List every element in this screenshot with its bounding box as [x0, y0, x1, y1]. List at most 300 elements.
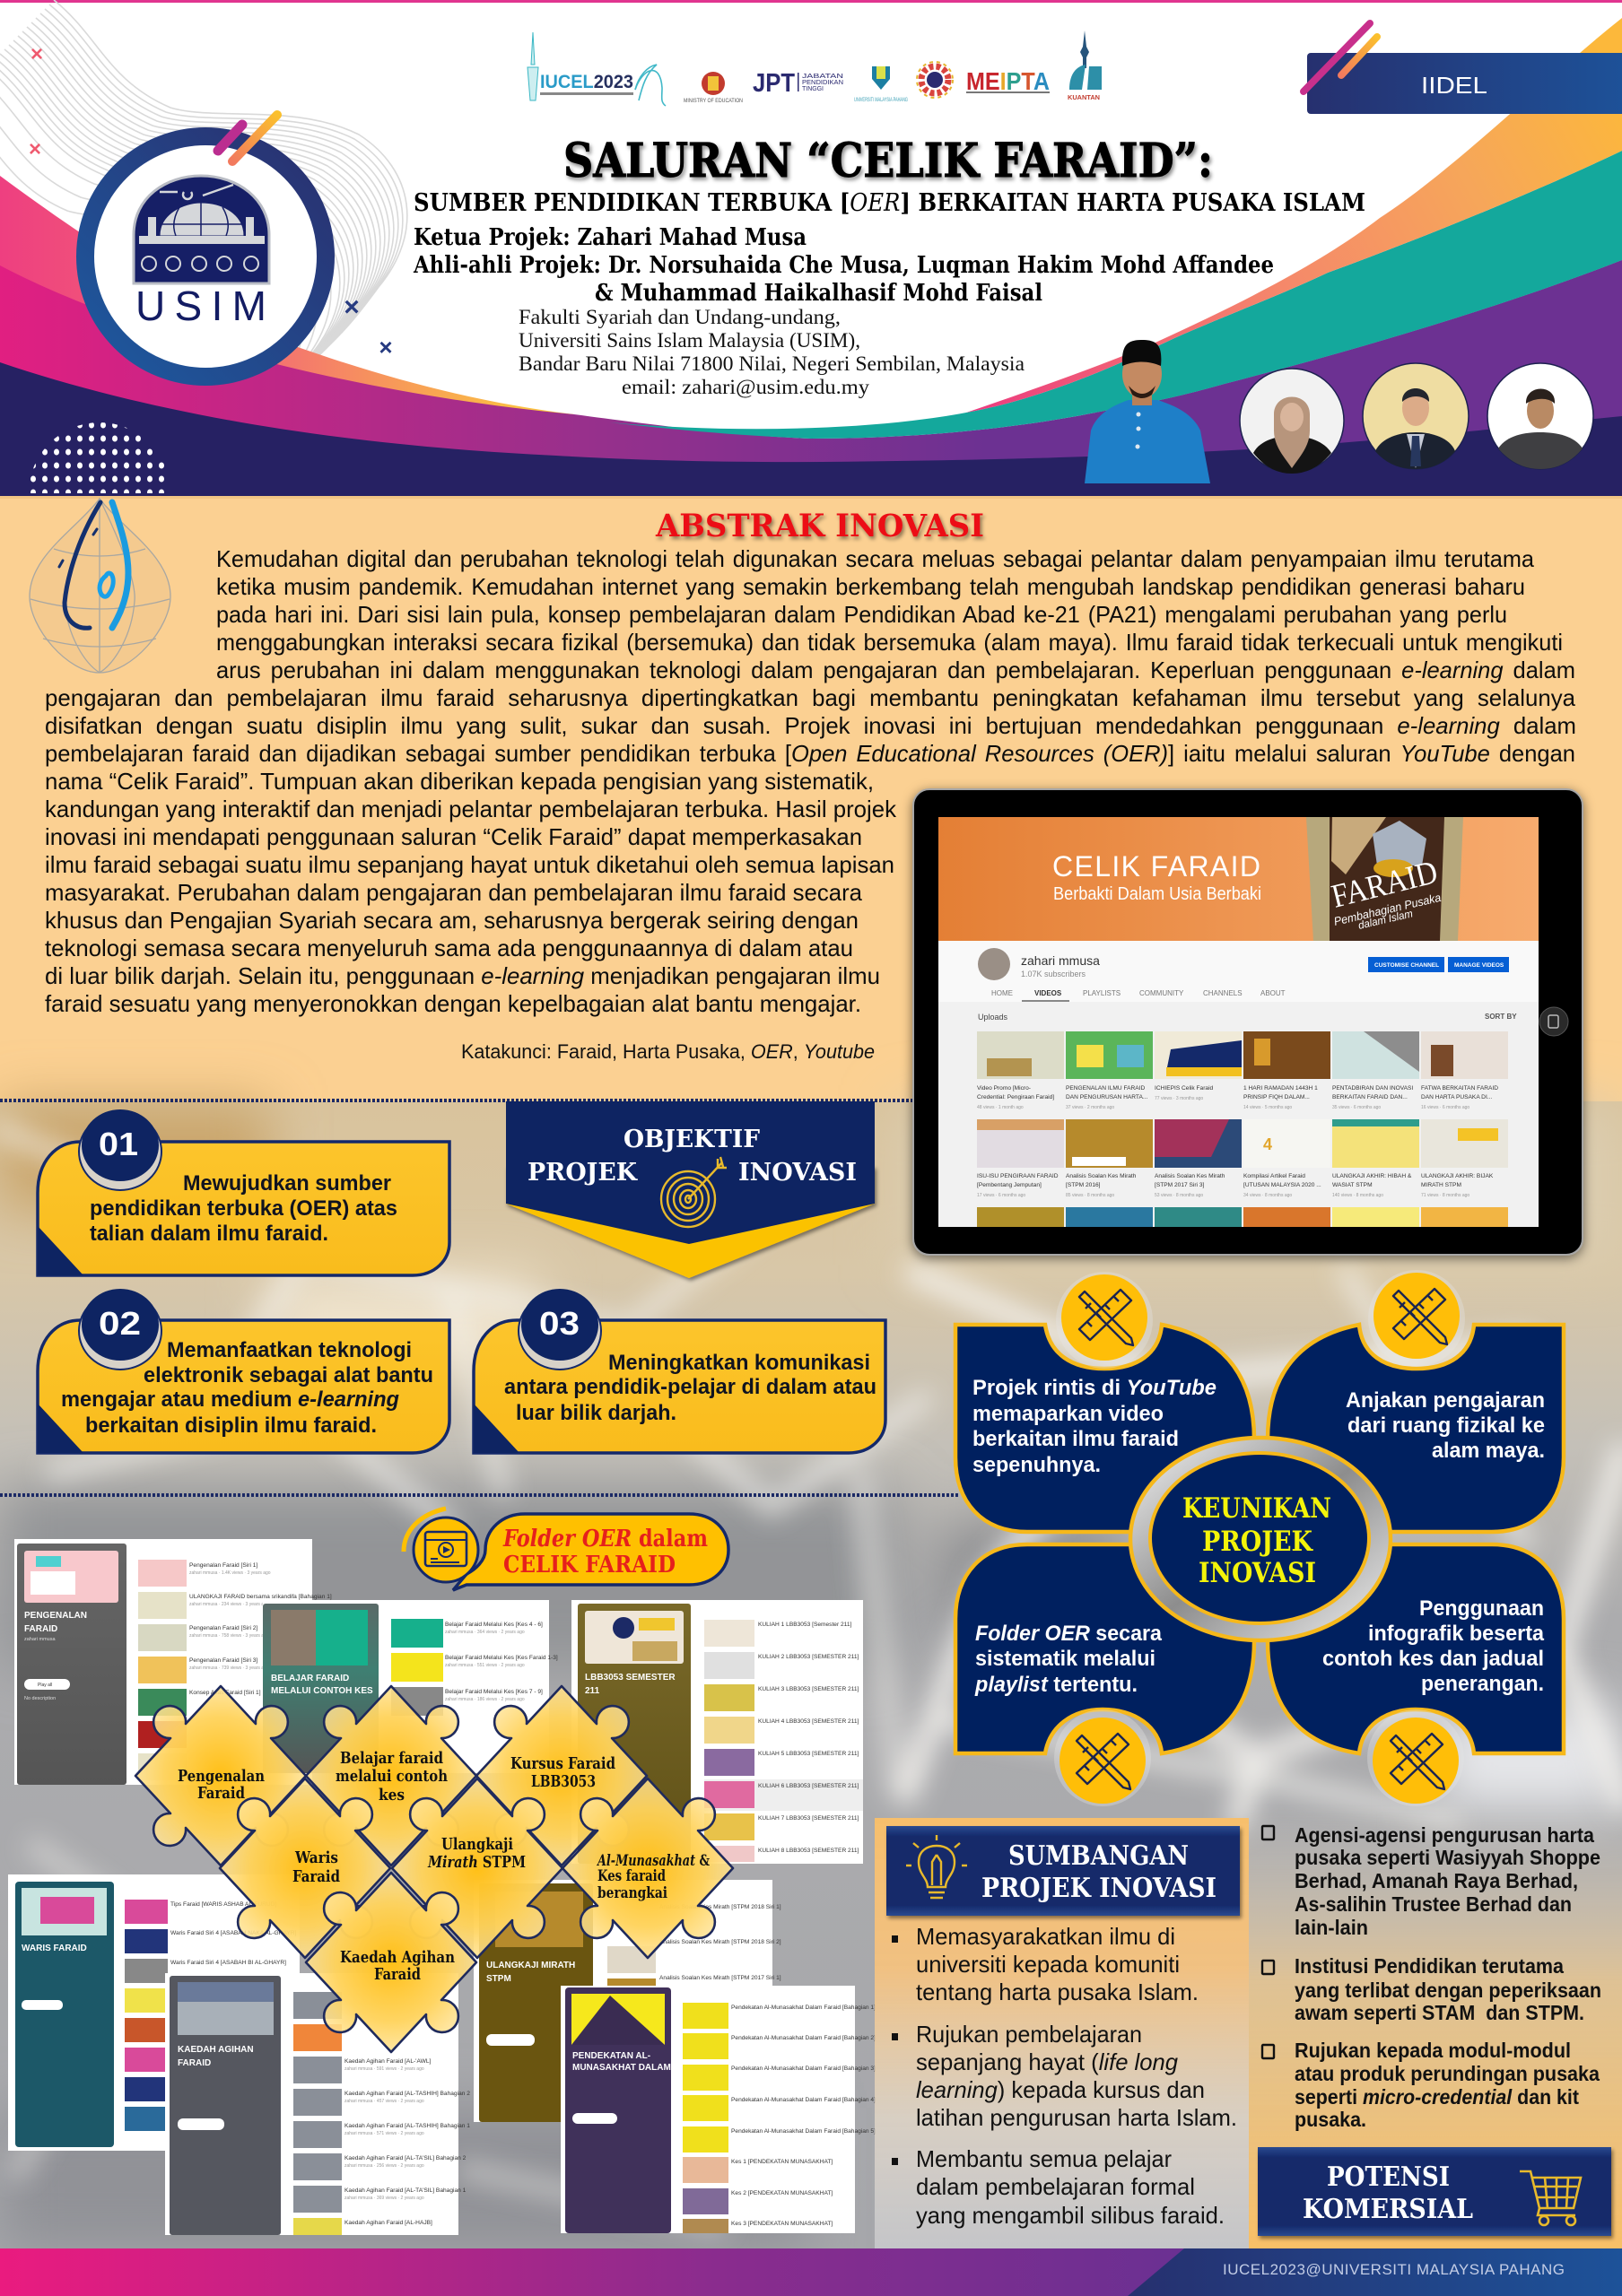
channel bar: zahari mmusa [1021, 953, 1100, 968]
logo: ring emblem [917, 62, 953, 98]
panel: playlist pendekatan al-munasakhat: Pendekatan Al-Munasakhat Dalam Faraid [Bahagian 5] [731, 2128, 876, 2135]
channel bar: HOME [991, 989, 1013, 997]
photo: project leader [1085, 340, 1210, 483]
badge: folder oer dalam celik faraid: Folder OER dalam [502, 1526, 708, 1552]
checklist: Agensi-agensi pengurusan harta [1295, 1823, 1594, 1847]
icon: shopping cart [1520, 2171, 1581, 2225]
logo: UMP: UNIVERSITI MALAYSIA PAHANG [854, 98, 908, 103]
panel: playlist kaedah agihan: Kaedah Agihan Faraid [AL-TASHIH] Bahagian 2 [344, 2091, 470, 2097]
channel banner: Berbakti Dalam Usia Berbaki [1053, 884, 1261, 904]
panel: playlist kaedah agihan [165, 1973, 470, 2235]
channel bar: PLAYLISTS [1083, 989, 1121, 997]
footer bar [0, 2248, 1622, 2296]
abstract text: faraid sesuatu yang menyeronokkan dengan kepelbagaian alat bantu mengajar. [45, 990, 861, 1017]
IIDEL banner [1304, 23, 1622, 114]
panel: playlist pendekatan al-munasakhat: Kes 3 [PENDEKATAN MUNASAKHAT] [731, 2221, 833, 2227]
quadrant: top left: berkaitan ilmu faraid [972, 1427, 1179, 1451]
logo: UMP [854, 66, 908, 103]
video grid: 77 views · 3 months ago [1155, 1096, 1203, 1101]
panel: playlist pendekatan al-munasakhat: Kes 2 [PENDEKATAN MUNASAKHAT] [731, 2190, 833, 2196]
panel: potensi komersial [1249, 1803, 1622, 2249]
bullet list: yang mengambil silibus faraid. [916, 2202, 1225, 2229]
project members: Ahli-ahli Projek: Dr. Norsuhaida Che Musa, Luqman Hakim Mohd Affandee [413, 252, 1274, 279]
panel: playlist pendekatan al-munasakhat: Pendekatan Al-Munasakhat Dalam Faraid [Bahagian 2] [731, 2035, 876, 2041]
panel: playlist pendekatan al-munasakhat: MUNASAKHAT DALAM... [572, 2063, 678, 2073]
channel bar: CUSTOMISE CHANNEL [1374, 962, 1439, 969]
panel: playlist pengenalan faraid: ULANGKAJI FARAID bersama srikandifa [Bahagian 1] [189, 1594, 332, 1600]
video grid: [Pembentang Jemputan] [977, 1182, 1042, 1188]
x marks: × [29, 137, 41, 161]
banner: objektif projek inovasi [506, 1101, 875, 1278]
video grid: 48 views · 1 month ago [977, 1105, 1024, 1110]
title [414, 134, 1365, 217]
panel: playlist pendekatan al-munasakhat: PENDEKATAN AL- [572, 2051, 650, 2061]
panel: playlist waris faraid: WARIS FARAID [22, 1944, 87, 1953]
checklist: As-salihin Trustee Berhad dan [1295, 1892, 1572, 1916]
card text: Mewujudkan sumber [183, 1171, 391, 1196]
abstract text [45, 545, 1576, 1017]
book cover [1306, 817, 1463, 941]
abstract text: pembelajaran faraid dan dijadikan sebagai sumber pendidikan terbuka [Open Educational Resources (OER)] iaitu melalui saluran YouTube dengan [45, 740, 1575, 767]
logo: MEIPTA: MEIPTA [966, 67, 1050, 95]
puzzle piece: pengenalan faraid: Pengenalan [178, 1767, 265, 1786]
panel: playlist pengenalan faraid: zahari mmusa · 234 views · 3 years ago [189, 1602, 269, 1607]
channel bar: SORT BY [1485, 1013, 1517, 1021]
video grid: DAN PENGURUSAN HARTA... [1066, 1094, 1148, 1100]
screen [938, 817, 1539, 1227]
panel: playlist kaedah agihan: Kaedah Agihan Faraid [AL-TASHIH] Bahagian 1 [344, 2123, 470, 2129]
partner logos strip [528, 30, 1102, 106]
video grid: Kompilasi Artikel Faraid [1243, 1173, 1305, 1179]
panel: playlist pengenalan faraid: FARAID [24, 1624, 57, 1634]
quadrant: bottom right: infografik beserta [1368, 1622, 1545, 1646]
video grid: ULANGKAJI AKHIR: BIJAK [1421, 1173, 1494, 1179]
logo: ministry crest [684, 72, 743, 104]
abstract text: teknologi semasa secara menyeluruh sama ada penggunaannya di dalam atau [45, 935, 853, 961]
banner: objektif projek inovasi: OBJEKTIF [624, 1126, 760, 1153]
abstract text: inovasi ini mendapati penggunaan saluran “Celik Faraid” dapat memperkasakan [45, 823, 862, 850]
video grid: 85 views · 8 months ago [1066, 1193, 1114, 1198]
checklist: awam seperti STAM dan STPM. [1295, 2001, 1584, 2024]
panel: playlist ulangkaji mirath: Analisis Soalan Kes Mirath [STPM 2018 Siri 1] [659, 1904, 781, 1910]
bullet list: Memasyarakatkan ilmu di [916, 1923, 1175, 1950]
panel: playlist lbb3053: KULIAH 3 LBB3053 [SEMESTER 211] [758, 1686, 859, 1692]
puzzle piece: ulangkaji mirath stpm: Ulangkaji [441, 1835, 513, 1854]
panel: playlist ulangkaji mirath: Analisis Soalan Kes Mirath [STPM 2018 Siri 2] [659, 1939, 781, 1945]
abstract text: menggabungkan interaksi secara fizikal (bersemuka) dan tidak bersemuka (alam maya). Ilmu faraid tidak terkecuali untuk mengikuti [216, 629, 1563, 656]
quadrant: bottom left [955, 1544, 1254, 1753]
card text: mengajar atau medium e-learning [61, 1387, 399, 1412]
icon: pencil and ruler top right [1368, 1270, 1465, 1367]
heading bar: PROJEK INOVASI [981, 1873, 1216, 1904]
panel: playlist pengenalan faraid: zahari mmusa · 1.4K views · 3 years ago [189, 1570, 271, 1576]
abstract text: pada hari ini. Dari sisi lain pula, konsep pembelajaran dalam Pendidikan Abad ke-21 (PA21) mengalami perubahan yang perlu [216, 601, 1507, 628]
video grid: ISU-ISU PENGIRAAN FARAID [977, 1173, 1059, 1179]
channel bar [938, 941, 1539, 1022]
project members: & Muhammad Haikalhasif Mohd Faisal [595, 280, 1042, 307]
panel: playlist lbb3053: LBB3053 SEMESTER [585, 1673, 676, 1683]
channel banner: CELIK FARAID [1052, 850, 1260, 883]
panel: playlist belajar faraid: zahari mmusa · 551 views · 2 years ago [445, 1663, 525, 1668]
objective card 03 [474, 1289, 885, 1453]
panel: playlist kaedah agihan: FARAID [178, 2058, 211, 2068]
abstract text: arus perubahan ini dalam menggunakan teknologi dalam pengajaran dan pembelajaran. Keperluan penggunaan e-learning dalam [216, 657, 1575, 683]
puzzle map of playlists [135, 1686, 733, 2052]
decorative stripes on logo [218, 115, 277, 161]
puzzle piece: belajar faraid [306, 1686, 476, 1866]
video grid: ICHIEPIS Celik Faraid [1155, 1085, 1214, 1091]
icon: video browser [414, 1518, 478, 1582]
video grid [977, 1031, 1508, 1227]
book cover: dalam Islam [1357, 907, 1414, 932]
card text: talian dalam ilmu faraid. [90, 1222, 328, 1246]
puzzle piece: kursus faraid: LBB3053 [531, 1772, 596, 1791]
puzzle piece: al-munasakhat: Al-Munasakhat & [596, 1852, 710, 1870]
panel: playlist belajar faraid: Belajar Faraid Melalui Kes [Kes Faraid 1-3] [445, 1655, 558, 1661]
panel: playlist belajar faraid: Belajar Faraid Melalui Kes [Kes 7 - 9] [445, 1689, 543, 1695]
panel: playlist pengenalan faraid: Konsep Asas Faraid [Siri 1] [189, 1690, 261, 1696]
puzzle piece: kaedah agihan faraid [306, 1873, 476, 2052]
puzzle piece: pengenalan faraid: Faraid [197, 1784, 245, 1803]
puzzle piece: al-munasakhat [562, 1779, 733, 1958]
quadrant: top right: dari ruang fizikal ke [1347, 1413, 1545, 1438]
affiliation [519, 306, 1025, 398]
puzzle piece: kursus faraid: Kursus Faraid [510, 1754, 615, 1773]
USIM logo: USIM [135, 283, 266, 329]
puzzle piece: kaedah agihan faraid: Kaedah Agihan [340, 1948, 455, 1967]
puzzle piece: ulangkaji mirath stpm: Mirath STPM [427, 1853, 526, 1872]
banner: objektif projek inovasi: INOVASI [738, 1159, 857, 1187]
video grid: BERKAITAN FARAID DAN... [1332, 1094, 1408, 1100]
panel: playlist kaedah agihan: Kaedah Agihan Faraid [AL-TA'SIL] Bahagian 1 [344, 2187, 467, 2194]
x marks: × [344, 292, 360, 322]
checklist: seperti micro-credential dan kit [1295, 2085, 1579, 2109]
card text: Memanfaatkan teknologi [167, 1338, 412, 1362]
logo: JPT: TINGGI [802, 84, 824, 92]
bullet list: tentang harta pusaka Islam. [916, 1979, 1199, 2005]
quadrant: bottom right: Penggunaan [1419, 1596, 1544, 1621]
bullet list: universiti kepada komuniti [916, 1951, 1180, 1978]
heading bar [886, 1826, 1240, 1916]
objective card 02 [38, 1289, 449, 1453]
puzzle piece: kaedah agihan faraid: Faraid [374, 1965, 421, 1984]
video grid: MIRATH STPM [1421, 1182, 1461, 1188]
panel: playlist kaedah agihan: zahari mmusa · 591 views · 2 years ago [344, 2066, 424, 2072]
logo: JPT: PENDIDIKAN [802, 78, 843, 86]
video grid: 4 [1263, 1135, 1272, 1153]
badge: folder oer dalam celik faraid [404, 1509, 728, 1590]
panel: playlist pendekatan al-munasakhat: Pendekatan Al-Munasakhat Dalam Faraid [Bahagian 4] [731, 2097, 876, 2103]
center hub: INOVASI [1199, 1557, 1316, 1589]
icon: Iqra drop logo [30, 499, 170, 673]
quadrant: bottom right [1268, 1544, 1564, 1753]
logo: IUCEL 2023 [528, 32, 666, 106]
quadrant: top right: alam maya. [1432, 1439, 1545, 1463]
panel: playlist pengenalan faraid: Pengenalan Faraid [Siri 2] [189, 1625, 257, 1631]
center hub: PROJEK [1202, 1526, 1313, 1558]
video grid: DAN HARTA PUSAKA DI... [1421, 1094, 1492, 1100]
video grid: [STPM 2016] [1066, 1182, 1101, 1188]
badge: folder oer dalam celik faraid: CELIK FARAID [503, 1552, 676, 1578]
footer bar: IUCEL2023@UNIVERSITI MALAYSIA PAHANG [1223, 2261, 1565, 2278]
abstract text: ilmu faraid sebagai suatu ilmu sepanjang hayat untuk diketahui oleh semua lapisan [45, 851, 894, 878]
abstract text: di luar bilik darjah. Selain itu, penggunaan e-learning menjadikan pengajaran ilmu [45, 962, 880, 989]
card text: antara pendidik-pelajar di dalam atau [504, 1375, 876, 1399]
title: SALURAN “CELIK FARAID”: [563, 134, 1213, 188]
panel: playlist lbb3053: KULIAH 6 LBB3053 [SEMESTER 211] [758, 1783, 859, 1789]
video grid: 1 HARI RAMADAN 1443H 1 [1243, 1085, 1318, 1091]
tablet: YouTube channel screenshot [913, 789, 1583, 1255]
center hub [1130, 1438, 1391, 1640]
channel banner [938, 817, 1539, 941]
puzzle piece: kursus faraid [476, 1686, 647, 1866]
panel: playlist belajar faraid: Belajar Faraid Melalui Kes [Kes 4 - 6] [445, 1622, 543, 1628]
blurred lattice background [0, 1101, 1622, 2251]
panel: playlist pendekatan al-munasakhat [561, 1986, 876, 2233]
affiliation: email: zahari@usim.edu.my [622, 376, 870, 398]
logo: JPT: JABATAN [802, 72, 843, 80]
video grid: WASIAT STPM [1332, 1182, 1373, 1188]
dotted dividers [0, 1100, 958, 1495]
checklist: Berhad, Amanah Raya Berhad, [1295, 1869, 1578, 1892]
heading bar: SUMBANGAN [1008, 1840, 1189, 1872]
video grid: PENGENALAN ILMU FARAID [1066, 1085, 1146, 1091]
panel: playlist pendekatan al-munasakhat: Pendekatan Al-Munasakhat Dalam Faraid [Bahagian 1] [731, 2005, 876, 2011]
puzzle piece: al-munasakhat: berangkai [597, 1884, 667, 1902]
panel: playlist ulangkaji mirath: Analisis Soalan Kes Mirath [STPM 2017 Siri 1] [659, 1975, 781, 1981]
panel: playlist kaedah agihan: zahari mmusa · 457 views · 2 years ago [344, 2099, 424, 2104]
video grid: ULANGKAJI AKHIR: HIBAH & [1332, 1173, 1412, 1179]
panel: playlist lbb3053 [571, 1600, 863, 1864]
panel: playlist ulangkaji mirath [474, 1880, 781, 2122]
panel: playlist lbb3053: KULIAH 5 LBB3053 [SEMESTER 211] [758, 1751, 859, 1757]
panel: playlist ulangkaji mirath: ULANGKAJI MIRATH [486, 1961, 575, 1970]
video grid: Credential: Pengiraan Faraid] [977, 1094, 1054, 1100]
panel: playlist pengenalan faraid: Pengenalan Faraid [Siri 3] [189, 1657, 257, 1664]
icon: home button [1539, 1007, 1568, 1036]
panel: playlist belajar faraid: BELAJAR FARAID [271, 1674, 349, 1683]
quadrant: top left: sepenuhnya. [972, 1453, 1101, 1477]
logo: Kuantan tower [1068, 30, 1102, 101]
checklist: pusaka seperti Wasiyyah Shoppe [1295, 1846, 1600, 1869]
panel: playlist lbb3053: KULIAH 1 LBB3053 [Semester 211] [758, 1622, 852, 1628]
panel: playlist pengenalan faraid: zahari mmusa · 739 views · 3 years ago [189, 1665, 269, 1671]
video grid: 34 views · 8 months ago [1243, 1193, 1292, 1198]
channel bar: 1.07K subscribers [1021, 970, 1086, 978]
puzzle piece: ulangkaji mirath stpm [392, 1779, 562, 1958]
quadrant: top right [1268, 1325, 1564, 1532]
abstract text: masyarakat. Perubahan dalam pengajaran dan pembelajaran ilmu faraid secara [45, 879, 863, 906]
card text: berkaitan disiplin ilmu faraid. [85, 1413, 377, 1438]
number badge 01: 01 [99, 1126, 138, 1162]
card text: Meningkatkan komunikasi [608, 1351, 870, 1375]
panel: playlist lbb3053: KULIAH 4 LBB3053 [SEMESTER 211] [758, 1718, 859, 1725]
quadrant: top left [955, 1325, 1254, 1532]
quadrant: bottom right: contoh kes dan jadual [1322, 1647, 1544, 1671]
panel: playlist kaedah agihan: Kaedah Agihan Faraid [AL-HAJB] [344, 2220, 432, 2226]
checklist [1262, 1823, 1601, 2131]
book cover: FARAID [1328, 854, 1442, 916]
icon: pencil and ruler bottom left [1054, 1709, 1151, 1806]
panel: playlist pengenalan faraid: zahari mmusa [24, 1637, 56, 1642]
USIM logo [85, 136, 326, 377]
heading bar [1258, 2147, 1611, 2236]
channel bar: COMMUNITY [1139, 989, 1184, 997]
panel: playlist belajar faraid [263, 1600, 558, 1773]
subtitle: SUMBER PENDIDIKAN TERBUKA [OER] BERKAITAN HARTA PUSAKA ISLAM [414, 189, 1365, 217]
affiliation: Universiti Sains Islam Malaysia (USIM), [519, 329, 860, 352]
video grid: 35 views · 6 months ago [1332, 1105, 1381, 1110]
card text: luar bilik darjah. [516, 1401, 676, 1425]
photo: member 2 [1363, 363, 1469, 469]
panel: playlist lbb3053: KULIAH 7 LBB3053 [SEMESTER 211] [758, 1815, 859, 1822]
panel: sumbangan projek inovasi [875, 1818, 1249, 2249]
panel: playlist pengenalan faraid: PENGENALAN [24, 1611, 87, 1621]
puzzle piece: waris faraid [220, 1779, 390, 1958]
heading bar: KOMERSIAL [1303, 2194, 1473, 2225]
abstract text: disifatkan dengan suatu disiplin ilmu yang sulit, sukar dan susah. Projek inovasi ini bertujuan mendedahkan penggunaan e-learning dalam [45, 712, 1576, 739]
number badge 01 [79, 1109, 161, 1190]
video grid: Video Promo [Micro- [977, 1085, 1031, 1091]
bullet list: Rujukan pembelajaran [916, 2021, 1142, 2048]
dotted semicircle decoration [31, 422, 164, 493]
puzzle piece: belajar faraid: Belajar faraid [340, 1749, 443, 1768]
objective card 01 [38, 1109, 449, 1275]
affiliation: Bandar Baru Nilai 71800 Nilai, Negeri Sembilan, Malaysia [519, 352, 1025, 375]
panel: playlist kaedah agihan: zahari mmusa · 256 views · 2 years ago [344, 2163, 424, 2169]
panel: playlist pengenalan faraid: zahari mmusa · 758 views · 3 years ago [189, 1633, 269, 1639]
bullet list [892, 1923, 1237, 2229]
x marks: × [31, 42, 43, 66]
video grid: [UTUSAN MALAYSIA 2020 ... [1243, 1182, 1321, 1188]
panel: playlist kaedah agihan: Kaedah Agihan Faraid [AL-'AWL] [344, 2058, 431, 2065]
number badge 03: 03 [539, 1305, 580, 1342]
puzzle piece: waris faraid: Waris [294, 1848, 338, 1867]
abstract text: khusus dan Pengajian Syariah secara am, seharusnya bergerak seiring dengan [45, 907, 859, 934]
puzzle piece: waris faraid: Faraid [292, 1867, 340, 1886]
checklist: lain-lain [1295, 1916, 1368, 1939]
number badge 03 [519, 1289, 601, 1370]
bullet list: learning) kepada kursus dan [916, 2076, 1205, 2103]
channel bar: MANAGE VIDEOS [1454, 962, 1504, 969]
icon: pencil and ruler top left [1056, 1272, 1153, 1369]
quadrant: bottom left: Folder OER secara [975, 1622, 1163, 1646]
banner: objektif projek inovasi: PROJEK [528, 1159, 639, 1187]
panel: playlist kaedah agihan: KAEDAH AGIHAN [178, 2045, 254, 2055]
card text: elektronik sebagai alat bantu [144, 1363, 433, 1387]
heading: abstrak inovasi: ABSTRAK INOVASI [655, 508, 984, 544]
video grid: PRINSIP FIQH DALAM... [1243, 1094, 1310, 1100]
quadrant: bottom left: sistematik melalui [975, 1647, 1155, 1671]
panel: playlist lbb3053: KULIAH 8 LBB3053 [SEMESTER 211] [758, 1848, 859, 1854]
abstract text: kandungan yang interaktif dan menjadi pelantar pembelajaran terbuka. Hasil projek [45, 796, 897, 822]
panel: playlist ulangkaji mirath: STPM [486, 1974, 511, 1984]
logo: JPT [753, 69, 843, 98]
checklist: Rujukan kepada modul-modul [1295, 2039, 1571, 2062]
header background [0, 0, 1622, 496]
panel: playlist belajar faraid: MELALUI CONTOH KES [271, 1686, 373, 1696]
abstract text: pengajaran dan pembelajaran ilmu faraid seharusnya dipertingkatkan bagi membantu peningkatan kefahaman ilmu tersebut yang selalunya [45, 684, 1576, 711]
abstract text: nama “Celik Faraid”. Tumpuan akan diberikan kepada pengisian yang sistematik, [45, 768, 874, 795]
checklist: yang terlibat dengan peperiksaan [1295, 1979, 1601, 2002]
card text [504, 1351, 876, 1425]
logo: JPT: JPT [753, 69, 795, 98]
logo: Kuantan tower: KUANTAN [1068, 95, 1100, 101]
panel: playlist waris faraid: Tips Faraid [WARIS ASHAB AL-FURUD] [170, 1901, 276, 1908]
project members [413, 224, 1274, 307]
quadrant: top left: Projek rintis di YouTube [972, 1376, 1216, 1400]
card text [61, 1338, 433, 1438]
book cover: Pembahagian Pusaka [1332, 891, 1443, 928]
panel: playlist waris faraid: Waris Faraid Siri 4 [ASABAH NAKA AL-GHAYR] [170, 1930, 297, 1936]
panel: playlist belajar faraid: zahari mmusa · 364 views · 2 years ago [445, 1630, 525, 1635]
panel: playlist pendekatan al-munasakhat: Pendekatan Al-Munasakhat Dalam Faraid [Bahagian 3] [731, 2066, 876, 2072]
panel: playlist waris faraid: Waris Faraid Siri 4 [ASABAH BI AL-GHAYR] [170, 1960, 286, 1966]
checklist: atau produk perundingan pusaka [1295, 2062, 1600, 2085]
quadrant: bottom right: penerangan. [1421, 1672, 1544, 1696]
panel: playlist pengenalan faraid: No description [24, 1696, 56, 1701]
puzzle piece: belajar faraid: kes [379, 1786, 405, 1805]
quadrant: bottom left: playlist tertentu. [974, 1673, 1138, 1697]
bullet list: Membantu semua pelajar [916, 2145, 1172, 2172]
video grid: [STPM 2017 Siri 3] [1155, 1182, 1205, 1188]
x marks: × [379, 334, 393, 361]
video grid: 17 views · 6 months ago [977, 1193, 1025, 1198]
channel bar: CHANNELS [1203, 989, 1243, 997]
photo: member 1 [1240, 369, 1344, 474]
center hub: KEUNIKAN [1182, 1492, 1331, 1525]
photo: member 3 [1487, 363, 1593, 469]
logo: ministry crest: MINISTRY OF EDUCATION [684, 99, 743, 104]
panel: playlist lbb3053: KULIAH 2 LBB3053 [SEMESTER 211] [758, 1654, 859, 1660]
video grid: 37 views · 2 months ago [1066, 1105, 1114, 1110]
affiliation: Fakulti Syariah dan Undang-undang, [519, 306, 841, 328]
abstract panel [0, 496, 1622, 1101]
channel bar: ABOUT [1260, 989, 1286, 997]
abstract text: ketika musim pandemik. Kemudahan internet yang semakin berkembang telah mengubah landskap pendidikan generasi baharu [216, 573, 1525, 600]
icon: pencil and ruler bottom right [1367, 1709, 1464, 1806]
number badge 02: 02 [99, 1305, 141, 1342]
video grid: 53 views · 8 months ago [1155, 1193, 1203, 1198]
channel bar: VIDEOS [1034, 989, 1062, 997]
panel: playlist belajar faraid: zahari mmusa · 186 views · 2 years ago [445, 1697, 525, 1702]
video grid: PENTADBIRAN DAN INOVASI [1332, 1085, 1413, 1091]
puzzle piece: al-munasakhat: Kes faraid [597, 1867, 666, 1885]
keunikan projek inovasi diagram [955, 1270, 1564, 1806]
card text: pendidikan terbuka (OER) atas [90, 1196, 397, 1221]
card text [90, 1171, 397, 1246]
checklist: pusaka. [1295, 2108, 1366, 2131]
panel: playlist lbb3053: 211 [585, 1686, 600, 1696]
heading bar: POTENSI [1327, 2161, 1450, 2193]
number badge 02 [79, 1289, 161, 1370]
panel: playlist waris faraid [8, 1874, 300, 2151]
IIDEL banner: IIDEL [1421, 72, 1487, 99]
x marks [29, 42, 393, 361]
video grid: 71 views · 8 months ago [1421, 1193, 1469, 1198]
quadrant: top left: memaparkan video [972, 1402, 1164, 1426]
channel bar: Uploads [978, 1013, 1008, 1022]
panel: playlist kaedah agihan: Kaedah Agihan Faraid [AL-TA'SIL] Bahagian 2 [344, 2155, 467, 2161]
video grid: Analisis Soalan Kes Mirath [1066, 1173, 1137, 1179]
panel: playlist kaedah agihan: zahari mmusa · 571 views · 2 years ago [344, 2131, 424, 2136]
abstract text: Kemudahan digital dan perubahan teknologi telah digunakan secara meluas sebagai pelantar dalam penyampaian ilmu terutama [216, 545, 1535, 572]
checklist: Institusi Pendidikan terutama [1295, 1954, 1564, 1978]
bullet list: dalam pembelajaran formal [916, 2173, 1195, 2200]
panel: playlist pengenalan faraid: Play all [38, 1683, 52, 1688]
quadrant: top right: Anjakan pengajaran [1346, 1388, 1545, 1413]
panel: playlist pengenalan faraid [14, 1539, 332, 1785]
